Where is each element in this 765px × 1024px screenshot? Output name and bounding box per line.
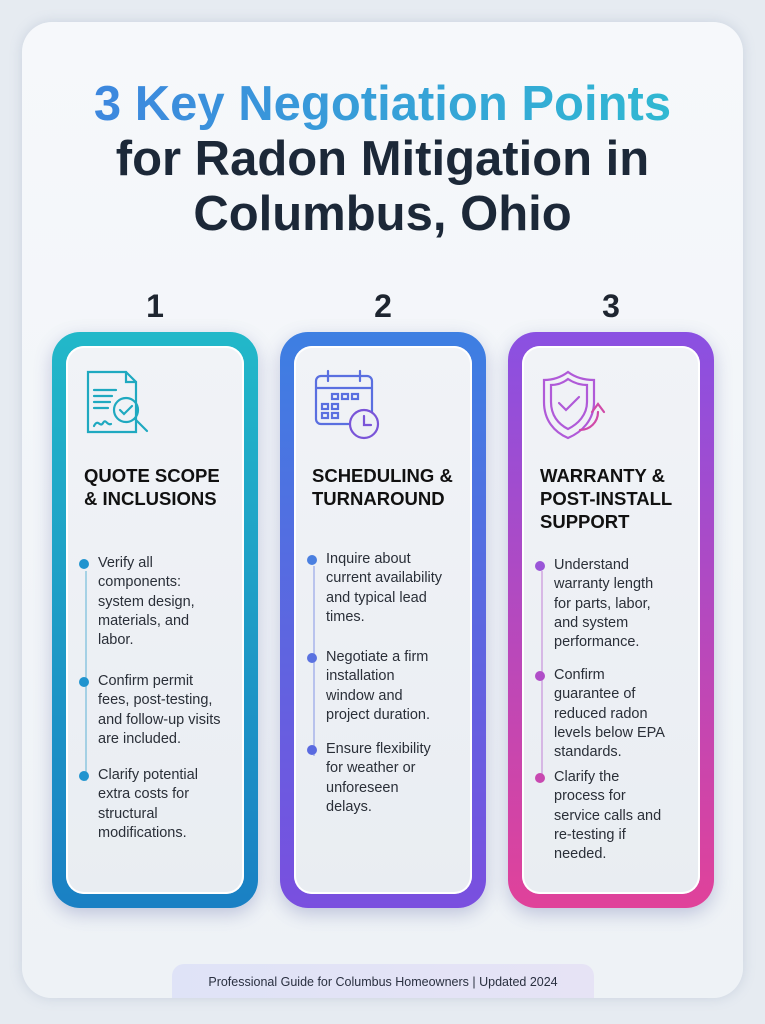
- bullet 1: Understand: [554, 557, 629, 573]
- bullet 1: system design,: [98, 594, 195, 610]
- bullet 1: warranty length: [554, 576, 653, 592]
- bullet 2: guarantee of: [554, 686, 635, 702]
- heading: WARRANTY &: [540, 465, 665, 486]
- bullet 2: are included.: [98, 731, 181, 747]
- bullet 2: Confirm permit: [98, 673, 193, 689]
- bullet 2: and follow-up visits: [98, 712, 220, 728]
- bullet 3: needed.: [554, 846, 606, 862]
- bullet 3: for weather or: [326, 760, 415, 776]
- bullet 3: Ensure flexibility: [326, 741, 431, 757]
- number 1: 1: [146, 288, 164, 324]
- bullet 2: Confirm: [554, 667, 605, 683]
- title: for Radon Mitigation in: [116, 132, 649, 186]
- bullet 2: standards.: [554, 744, 622, 760]
- icon: document magnifier: [86, 370, 148, 434]
- bullet 1: Inquire about: [326, 551, 411, 567]
- bullet 1: components:: [98, 574, 181, 590]
- bullet 3: process for: [554, 788, 626, 804]
- icon: shield check: [542, 370, 606, 440]
- heading: [84, 465, 220, 509]
- heading: [312, 465, 453, 509]
- heading: QUOTE SCOPE: [84, 465, 220, 486]
- bullet 2: [79, 673, 220, 747]
- bullet 1: materials, and: [98, 613, 189, 629]
- bullet 3: structural: [98, 806, 158, 822]
- panel: quote scope: [52, 332, 258, 908]
- bullet 2: fees, post-testing,: [98, 692, 212, 708]
- title: 3 Key Negotiation Points: [94, 77, 671, 131]
- heading: SCHEDULING &: [312, 465, 453, 486]
- bullet 2: [535, 667, 665, 760]
- number 3: 3: [602, 288, 620, 324]
- bullet 1: performance.: [554, 634, 639, 650]
- bullet 2: reduced radon: [554, 706, 648, 722]
- bullet 3: delays.: [326, 799, 372, 815]
- bullet 3: extra costs for: [98, 786, 189, 802]
- heading: POST-INSTALL: [540, 488, 672, 509]
- bullet 1: [307, 551, 442, 625]
- footer: [172, 964, 594, 998]
- panel: scheduling: [280, 332, 486, 908]
- footer: Professional Guide for Columbus Homeowners | Updated 2024: [208, 975, 558, 989]
- bullet 3: [79, 767, 198, 841]
- bullet 2: levels below EPA: [554, 725, 665, 741]
- bullet 3: unforeseen: [326, 780, 399, 796]
- bullet 1: Verify all: [98, 555, 153, 571]
- heading: [540, 465, 672, 532]
- bullet 3: Clarify potential: [98, 767, 198, 783]
- heading: & INCLUSIONS: [84, 488, 217, 509]
- title: Columbus, Ohio: [193, 187, 572, 241]
- bullet 1: [79, 555, 195, 648]
- bullet 2: Negotiate a firm: [326, 649, 428, 665]
- heading: TURNAROUND: [312, 488, 445, 509]
- bullet 1: for parts, labor,: [554, 596, 651, 612]
- bullet 2: [307, 649, 430, 723]
- bullet 2: window and: [326, 688, 403, 704]
- bullet 1: labor.: [98, 632, 133, 648]
- icon: calendar clock: [314, 370, 380, 440]
- bullet 1: and system: [554, 615, 628, 631]
- bullet 3: service calls and: [554, 808, 661, 824]
- bullet 3: [307, 741, 431, 815]
- bullet 3: modifications.: [98, 825, 187, 841]
- bullet 1: times.: [326, 609, 365, 625]
- bullet 3: Clarify the: [554, 769, 619, 785]
- bullet 3: [535, 769, 661, 862]
- bullet 1: [535, 557, 653, 650]
- title: [94, 77, 671, 241]
- bullet 1: and typical lead: [326, 590, 427, 606]
- bullet 1: current availability: [326, 570, 442, 586]
- panel: warranty: [508, 332, 714, 908]
- bullet 2: installation: [326, 668, 395, 684]
- bullet 3: re-testing if: [554, 827, 626, 843]
- number 2: 2: [374, 288, 392, 324]
- heading: SUPPORT: [540, 511, 629, 532]
- bullet 2: project duration.: [326, 707, 430, 723]
